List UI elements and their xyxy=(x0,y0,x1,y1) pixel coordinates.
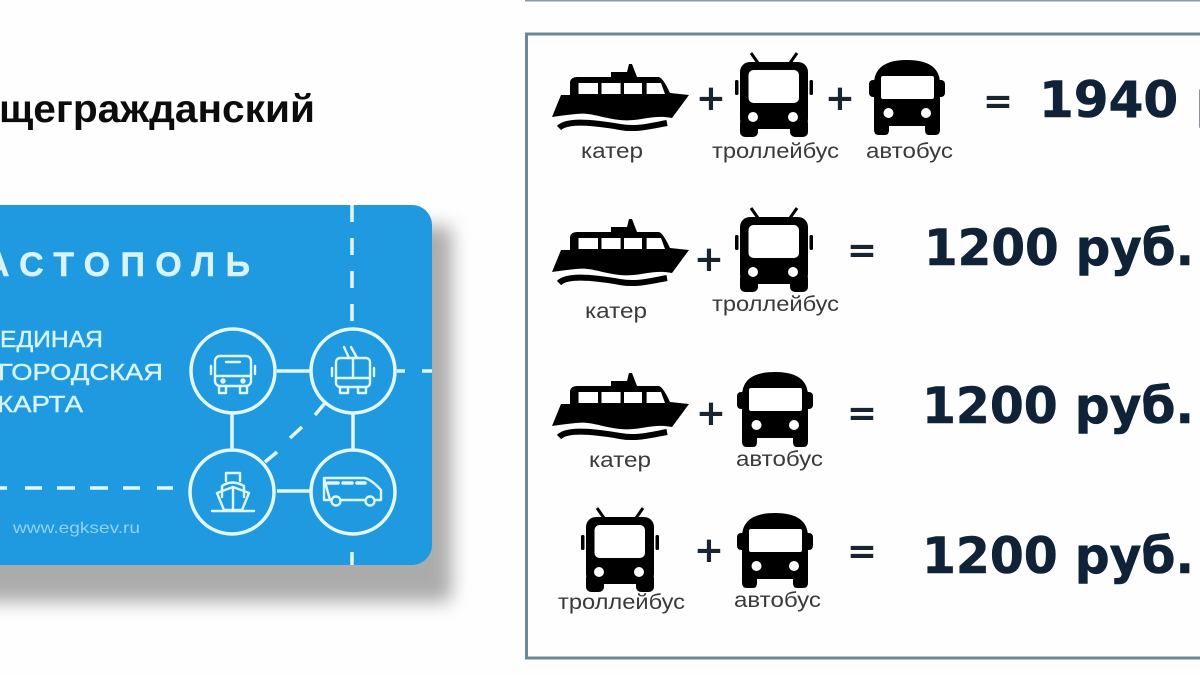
icon: card ship xyxy=(212,473,254,511)
icon: trolleybus xyxy=(735,208,813,292)
plus: + xyxy=(825,78,855,119)
title: щегражданский xyxy=(0,88,315,131)
equals: = xyxy=(847,393,877,434)
icon: card bus xyxy=(211,356,255,393)
icon: boat xyxy=(552,64,689,128)
card caption: ЕДИНАЯ xyxy=(0,326,103,352)
label: trolleybus: троллейбус xyxy=(712,293,839,316)
card website: www.egksev.ru xyxy=(12,520,140,537)
plus: + xyxy=(694,530,724,571)
equals: = xyxy=(847,531,877,572)
panel: transport card xyxy=(0,205,432,565)
row 2: boat + trolleybus = 1200 xyxy=(552,208,1194,323)
label: bus: автобус xyxy=(734,589,821,612)
plus: + xyxy=(696,393,726,434)
row 1: boat + trolleybus + bus = 1940 xyxy=(552,53,1200,163)
plus: + xyxy=(696,78,726,119)
label: boat: катер xyxy=(589,449,651,472)
price: 1200 руб. xyxy=(922,527,1194,585)
icon: bus xyxy=(869,60,945,135)
icon: card trolleybus xyxy=(332,347,374,393)
icon: trolleybus xyxy=(735,53,813,137)
icon: boat xyxy=(552,219,689,283)
panel: fares xyxy=(526,34,1200,658)
label: bus: автобус xyxy=(736,448,823,471)
label: trolleybus: троллейбус xyxy=(558,591,685,614)
row 3: boat + bus = 1200 xyxy=(552,372,1194,472)
icon: card van xyxy=(324,478,381,506)
card network diagram xyxy=(0,205,432,565)
icon: bus xyxy=(737,513,813,588)
equals: = xyxy=(983,81,1013,122)
label: bus: автобус xyxy=(866,140,953,163)
plus: + xyxy=(694,239,724,280)
top rule xyxy=(525,0,1200,2)
equals: = xyxy=(847,230,877,271)
label: trolleybus: троллейбус xyxy=(712,140,839,163)
icon: bus xyxy=(737,372,813,447)
row 4: trolleybus + bus = 1200 xyxy=(558,508,1194,614)
label: boat: катер xyxy=(581,140,643,163)
icon: trolleybus xyxy=(581,508,659,592)
icon: boat xyxy=(552,373,689,437)
price: 1200 руб. xyxy=(924,219,1194,277)
card shadow xyxy=(0,226,452,602)
card caption xyxy=(0,326,163,417)
price: 1200 руб. xyxy=(922,377,1194,435)
card caption: ГОРОДСКАЯ xyxy=(0,359,163,385)
label: boat: катер xyxy=(585,300,647,323)
